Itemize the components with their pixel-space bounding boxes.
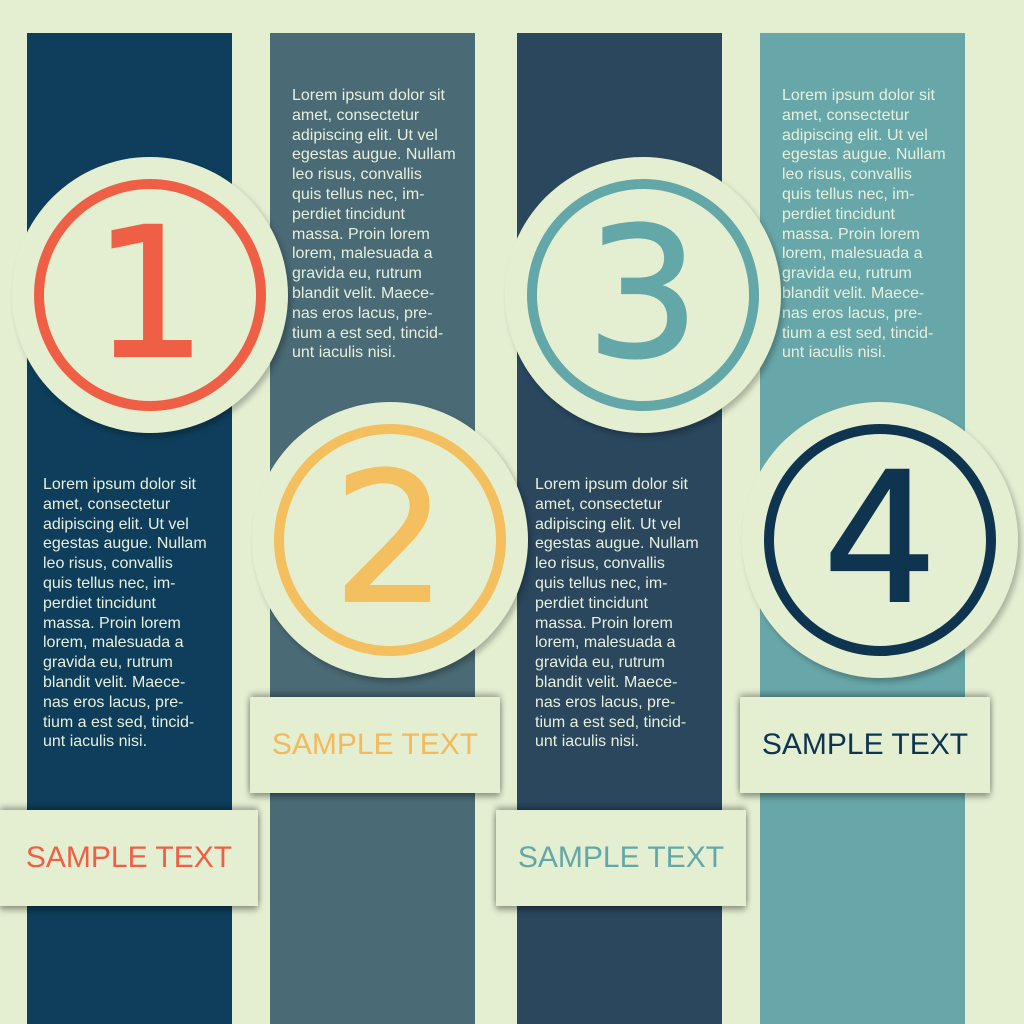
circle 1: 1 [93, 190, 207, 399]
label band col3: SAMPLE TEXT [518, 841, 724, 874]
text block col2 [292, 87, 456, 361]
text block col1: lorem, malesuada a [43, 634, 184, 651]
text block col4: blandit velit. Maece- [782, 285, 924, 302]
text block col3: blandit velit. Maece- [535, 674, 677, 691]
circle 4: 4 [823, 435, 937, 644]
text block col3 [535, 476, 699, 750]
text block col2: lorem, malesuada a [292, 245, 433, 262]
text block col3: nas eros lacus, pre- [535, 694, 676, 711]
text block col3: leo risus, convallis [535, 555, 665, 572]
text block col1: amet, consectetur [43, 496, 170, 513]
text block col3: unt iaculis nisi. [535, 733, 639, 750]
text block col1: unt iaculis nisi. [43, 733, 147, 750]
text block col4 [782, 87, 946, 361]
column 1 [27, 33, 232, 1024]
text block col1: nas eros lacus, pre- [43, 694, 184, 711]
text block col1: Lorem ipsum dolor sit [43, 476, 196, 493]
circle 2 [252, 402, 528, 678]
text block col2: Lorem ipsum dolor sit [292, 87, 445, 104]
text block col1 [43, 476, 207, 750]
text block col1: gravida eu, rutrum [43, 654, 173, 671]
text block col3: Lorem ipsum dolor sit [535, 476, 688, 493]
label band col1: SAMPLE TEXT [26, 841, 232, 874]
text block col3: gravida eu, rutrum [535, 654, 665, 671]
text block col3: perdiet tincidunt [535, 595, 648, 612]
text block col4: gravida eu, rutrum [782, 265, 912, 282]
text block col1: massa. Proin lorem [43, 615, 181, 632]
text block col3: tium a est sed, tincid- [535, 714, 686, 731]
text block col4: unt iaculis nisi. [782, 344, 886, 361]
text block col4: Lorem ipsum dolor sit [782, 87, 935, 104]
text block col3: quis tellus nec, im- [535, 575, 668, 592]
text block col2: gravida eu, rutrum [292, 265, 422, 282]
text block col2: unt iaculis nisi. [292, 344, 396, 361]
label band col4 [740, 697, 990, 793]
text block col2: adipiscing elit. Ut vel [292, 127, 438, 144]
text block col1: perdiet tincidunt [43, 595, 156, 612]
text block col1: blandit velit. Maece- [43, 674, 185, 691]
text block col2: nas eros lacus, pre- [292, 305, 433, 322]
text block col4: nas eros lacus, pre- [782, 305, 923, 322]
label band col2 [250, 697, 500, 793]
label band col4: SAMPLE TEXT [762, 728, 968, 761]
text block col4: quis tellus nec, im- [782, 186, 914, 203]
text block col2: massa. Proin lorem [292, 226, 430, 243]
text block col4: perdiet tincidunt [782, 206, 895, 223]
circle 3 [505, 157, 781, 433]
circle 4 [742, 402, 1018, 678]
text block col4: adipiscing elit. Ut vel [782, 127, 928, 144]
label band col3 [496, 810, 746, 906]
text block col2: egestas augue. Nullam [292, 146, 456, 163]
text block col3: adipiscing elit. Ut vel [535, 516, 681, 533]
circle 2: 2 [333, 435, 447, 644]
text block col3: amet, consectetur [535, 496, 662, 513]
label band col1 [0, 810, 258, 906]
text block col1: adipiscing elit. Ut vel [43, 516, 189, 533]
text block col4: egestas augue. Nullam [782, 146, 946, 163]
text block col1: leo risus, convallis [43, 555, 173, 572]
text block col3: lorem, malesuada a [535, 634, 676, 651]
text block col1: tium a est sed, tincid- [43, 714, 194, 731]
text block col3: massa. Proin lorem [535, 615, 673, 632]
text block col4: massa. Proin lorem [782, 226, 920, 243]
text block col4: tium a est sed, tincid- [782, 325, 933, 342]
text block col3: egestas augue. Nullam [535, 535, 699, 552]
text block col1: quis tellus nec, im- [43, 575, 176, 592]
circle 3: 3 [586, 190, 700, 399]
text block col2: tium a est sed, tincid- [292, 325, 443, 342]
column 4 [760, 33, 965, 1024]
text block col2: quis tellus nec, im- [292, 186, 424, 203]
text block col4: lorem, malesuada a [782, 245, 923, 262]
text block col4: leo risus, convallis [782, 166, 912, 183]
label band col2: SAMPLE TEXT [272, 728, 478, 761]
text block col2: leo risus, convallis [292, 166, 422, 183]
text block col2: amet, consectetur [292, 107, 419, 124]
column 3 [517, 33, 722, 1024]
text block col2: blandit velit. Maece- [292, 285, 434, 302]
text block col2: perdiet tincidunt [292, 206, 405, 223]
text block col4: amet, consectetur [782, 107, 909, 124]
circle 1 [12, 157, 288, 433]
text block col1: egestas augue. Nullam [43, 535, 207, 552]
column 2 [270, 33, 475, 1024]
